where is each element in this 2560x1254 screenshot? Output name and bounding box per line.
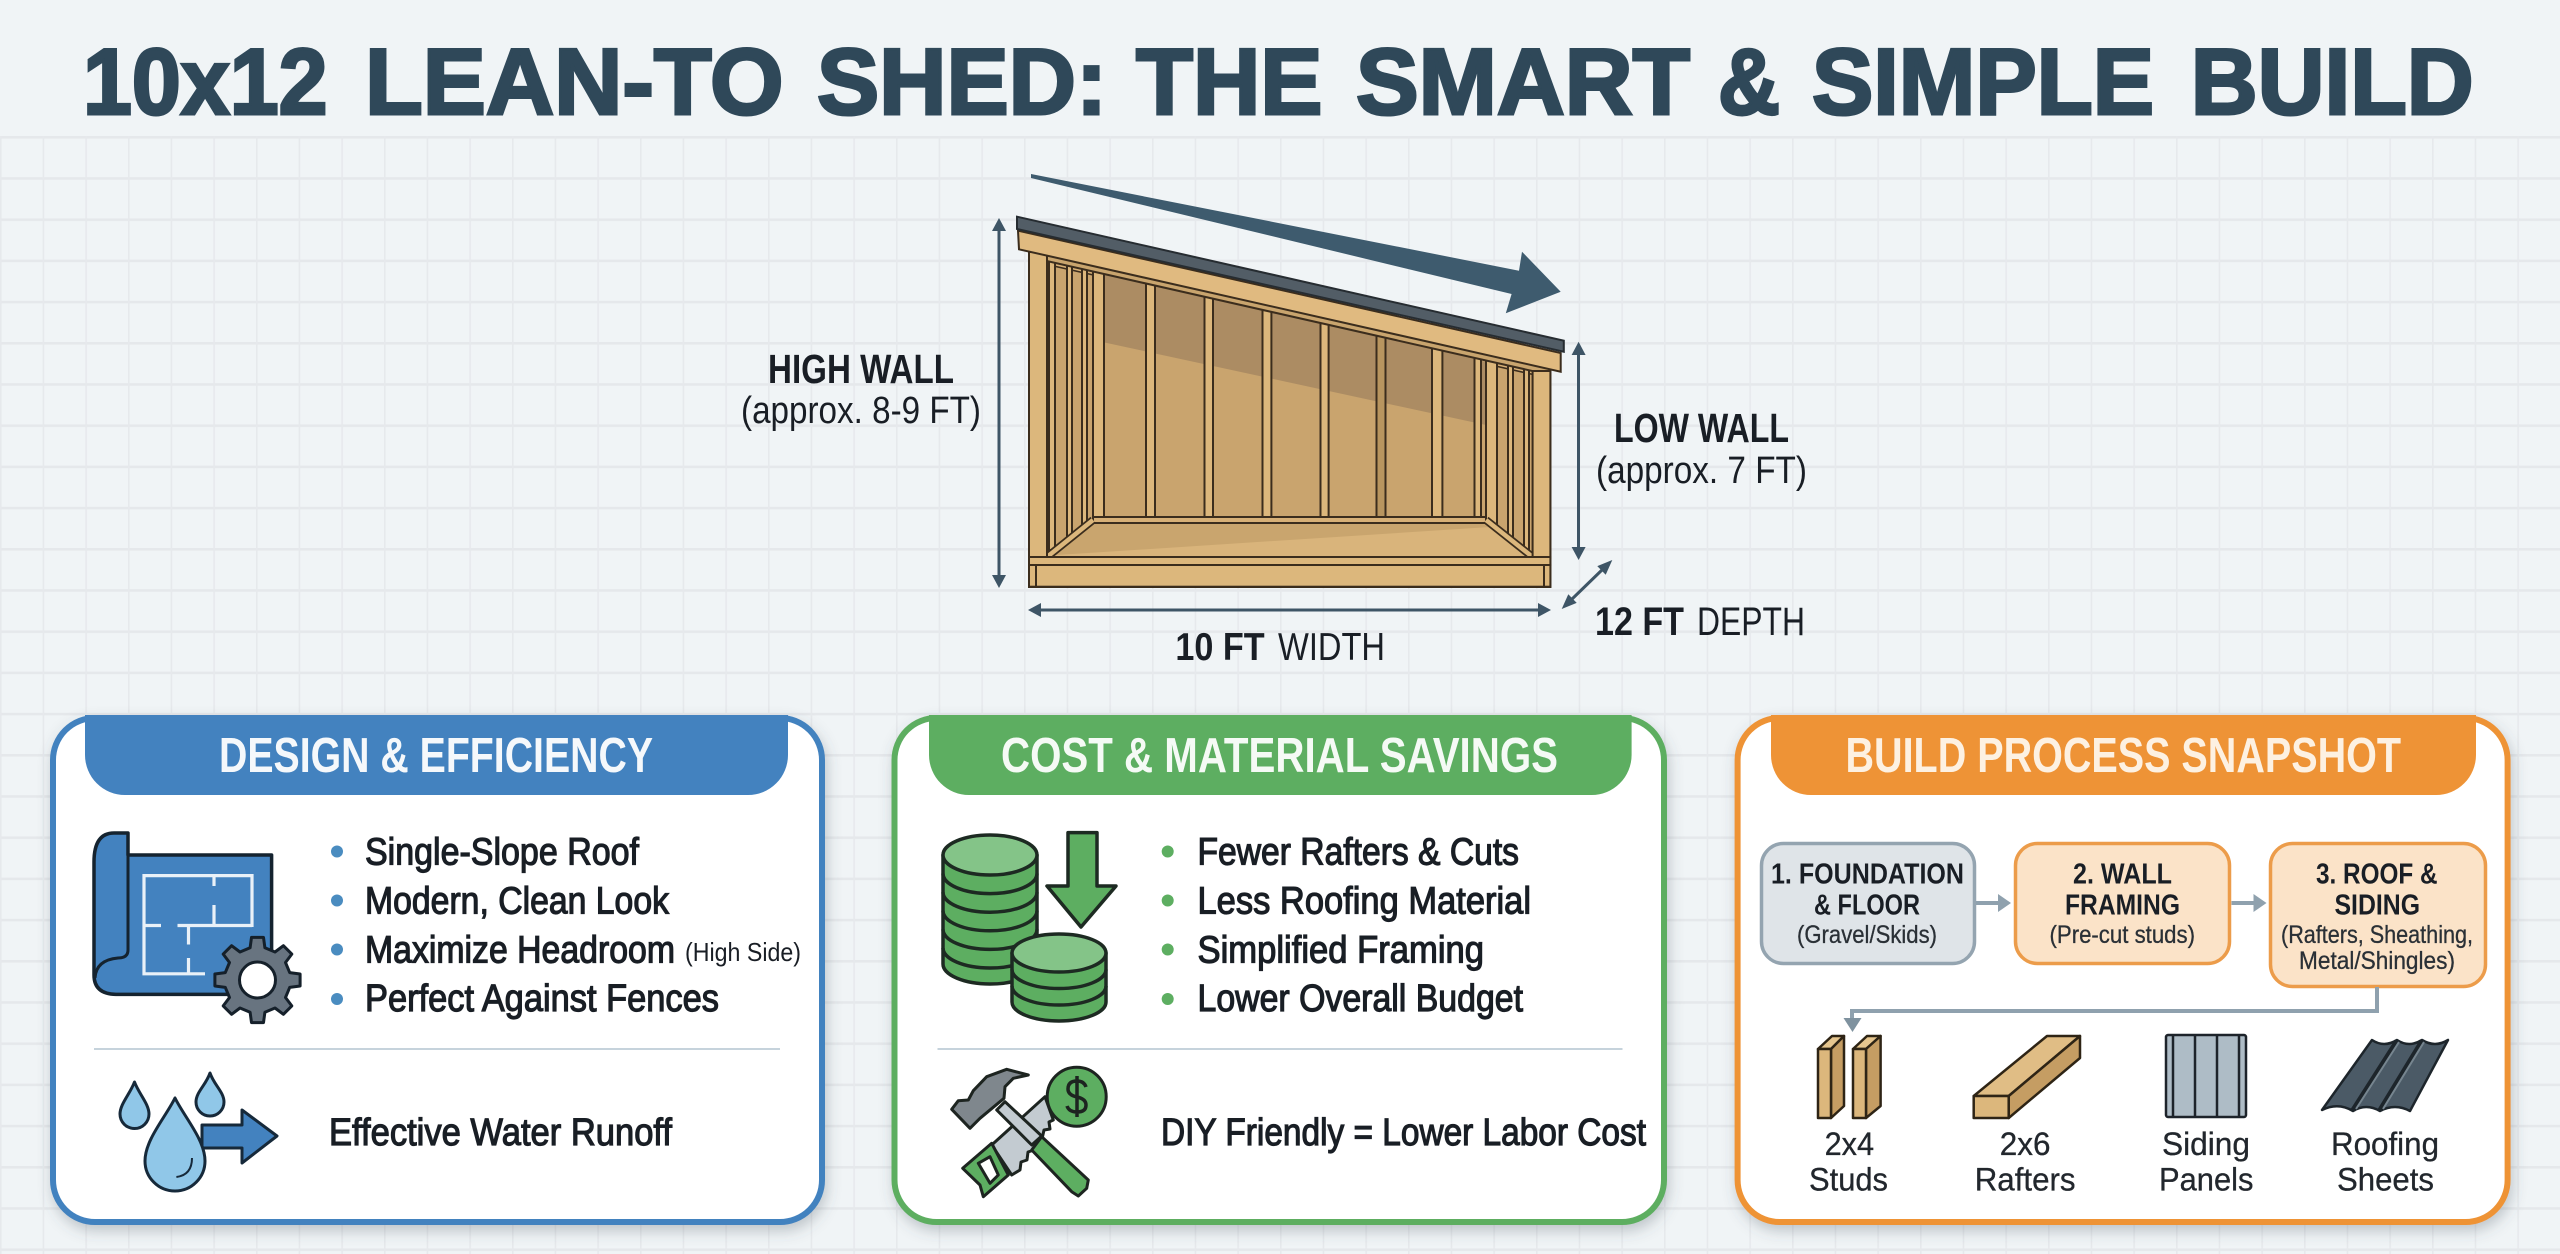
step 3: roof & siding: 3. ROOF & <box>2316 858 2438 890</box>
label: high wall: (approx. 8-9 FT) <box>741 390 981 432</box>
bullet list: design: Maximize Headroom <box>365 930 675 972</box>
label: high wall: HIGH WALL <box>768 346 954 392</box>
bullet list: cost <box>1162 832 1531 1020</box>
panel header <box>1771 715 2476 795</box>
label: 2x4 studs <box>1809 1126 1888 1198</box>
step 2: wall framing: (Pre-cut studs) <box>2050 921 2195 949</box>
label: siding panels <box>2159 1126 2254 1198</box>
icon: blueprint with gear <box>94 833 300 1023</box>
shed back wall <box>1047 264 1533 557</box>
arrow: low wall dimension <box>1572 342 1586 560</box>
bullet list: cost: Less Roofing Material <box>1198 880 1531 922</box>
icon: 2x4 studs <box>1818 1036 1881 1118</box>
panel: design & efficiency <box>53 715 822 1222</box>
panel card <box>53 718 822 1222</box>
bullet list: cost: Simplified Framing <box>1198 930 1484 972</box>
shed floor <box>1047 522 1533 557</box>
icon: roofing sheets <box>2322 1040 2448 1111</box>
step 3: roof & siding: SIDING <box>2334 890 2420 922</box>
panel header: COST & MATERIAL SAVINGS <box>1001 729 1558 783</box>
arrow: connector to materials <box>1844 987 2377 1032</box>
panel: build process snapshot <box>1738 715 2508 1222</box>
label: roofing sheets: Roofing <box>2331 1126 2439 1162</box>
shed side and back studs <box>1049 240 1529 550</box>
label: low wall: LOW WALL <box>1614 405 1789 451</box>
shed corner posts <box>1029 252 1047 558</box>
bullet list: design: (High Side) <box>685 937 801 967</box>
bullet list: cost: Fewer Rafters & Cuts <box>1198 832 1519 874</box>
step 2: wall framing: FRAMING <box>2065 890 2180 922</box>
icon: coin stacks with down arrow <box>943 833 1116 1021</box>
arrow: roof slope direction <box>1031 174 1561 313</box>
title: SIMPLE <box>1812 29 2154 134</box>
label: 2x4 studs: 2x4 <box>1825 1126 1874 1162</box>
step 2: wall framing <box>2016 844 2230 964</box>
label: roofing sheets: Sheets <box>2337 1162 2434 1198</box>
text: effective water runoff: Effective Water Runoff <box>329 1112 672 1154</box>
label: width: 10 FT <box>1175 626 1265 669</box>
arrow: depth dimension <box>1562 560 1612 609</box>
panel: cost & material savings <box>894 715 1664 1222</box>
bullet list: design: Modern, Clean Look <box>365 880 670 922</box>
step 3: roof & siding: Metal/Shingles) <box>2299 947 2455 975</box>
step 3: roof & siding: (Rafters, Sheathing, <box>2281 921 2473 949</box>
title: SMART <box>1356 29 1690 134</box>
title: & <box>1718 29 1780 134</box>
title: BUILD <box>2191 29 2474 134</box>
label: depth <box>1595 600 1805 644</box>
panel card <box>894 718 1664 1222</box>
arrow: high wall dimension <box>992 218 1006 588</box>
step 1: foundation & floor: (Gravel/Skids) <box>1797 921 1937 949</box>
shed top plate <box>1029 249 1550 375</box>
shed roof <box>1017 217 1564 352</box>
icon: water drops with arrow <box>120 1073 277 1191</box>
arrow: width dimension <box>1028 603 1551 617</box>
panel card <box>1738 718 2508 1222</box>
step 1: foundation & floor: & FLOOR <box>1814 890 1920 922</box>
step 1: foundation & floor: 1. FOUNDATION <box>1771 858 1964 890</box>
label: low wall <box>1596 405 1807 492</box>
label: width: WIDTH <box>1278 626 1385 669</box>
title <box>83 29 2474 134</box>
label: depth: DEPTH <box>1697 600 1805 644</box>
label: low wall: (approx. 7 FT) <box>1596 450 1807 492</box>
bullet list: design <box>331 832 801 1020</box>
step 2: wall framing: 2. WALL <box>2073 858 2172 890</box>
label: high wall <box>741 346 981 432</box>
arrow: step 1 to 2 <box>1976 894 2011 912</box>
label: siding panels: Siding <box>2162 1126 2250 1162</box>
label: 2x6 rafters: 2x6 <box>2000 1126 2050 1162</box>
bullet list: design: Perfect Against Fences <box>365 978 719 1020</box>
bullet list: design: Single-Slope Roof <box>365 832 639 874</box>
label: 2x6 rafters: Rafters <box>1975 1162 2076 1198</box>
title: 10x12 <box>83 29 328 134</box>
shed frame silhouette <box>1029 252 1550 587</box>
icon: siding panels <box>2166 1035 2246 1117</box>
arrow: step 2 to 3 <box>2232 894 2266 912</box>
label: roofing sheets <box>2331 1126 2439 1198</box>
step 1: foundation & floor <box>1762 844 1974 964</box>
panel header <box>85 715 788 795</box>
title: SHED: <box>817 29 1107 134</box>
panel header: DESIGN & EFFICIENCY <box>219 729 653 783</box>
shed floor beam <box>1029 557 1550 587</box>
shed wall shadow <box>1093 262 1486 425</box>
diagram: shed framing <box>1017 217 1564 587</box>
text: DIY friendly: DIY Friendly = Lower Labor Cost <box>1161 1112 1646 1154</box>
title: LEAN-TO <box>365 29 784 134</box>
icon: 2x6 rafter <box>1974 1036 2080 1118</box>
label: depth: 12 FT <box>1595 600 1684 644</box>
shed fascia <box>1018 231 1561 372</box>
bullet list: cost: Lower Overall Budget <box>1198 978 1523 1020</box>
label: 2x6 rafters <box>1975 1126 2076 1198</box>
label: siding panels: Panels <box>2159 1162 2254 1198</box>
label: 2x4 studs: Studs <box>1809 1162 1888 1198</box>
label: width <box>1175 626 1385 669</box>
panel header: BUILD PROCESS SNAPSHOT <box>1846 729 2401 783</box>
title: THE <box>1136 29 1322 134</box>
panel header <box>929 715 1632 795</box>
icon: crossed hammer, saw and dollar coin <box>952 1067 1106 1197</box>
step 3: roof & siding <box>2270 844 2486 986</box>
